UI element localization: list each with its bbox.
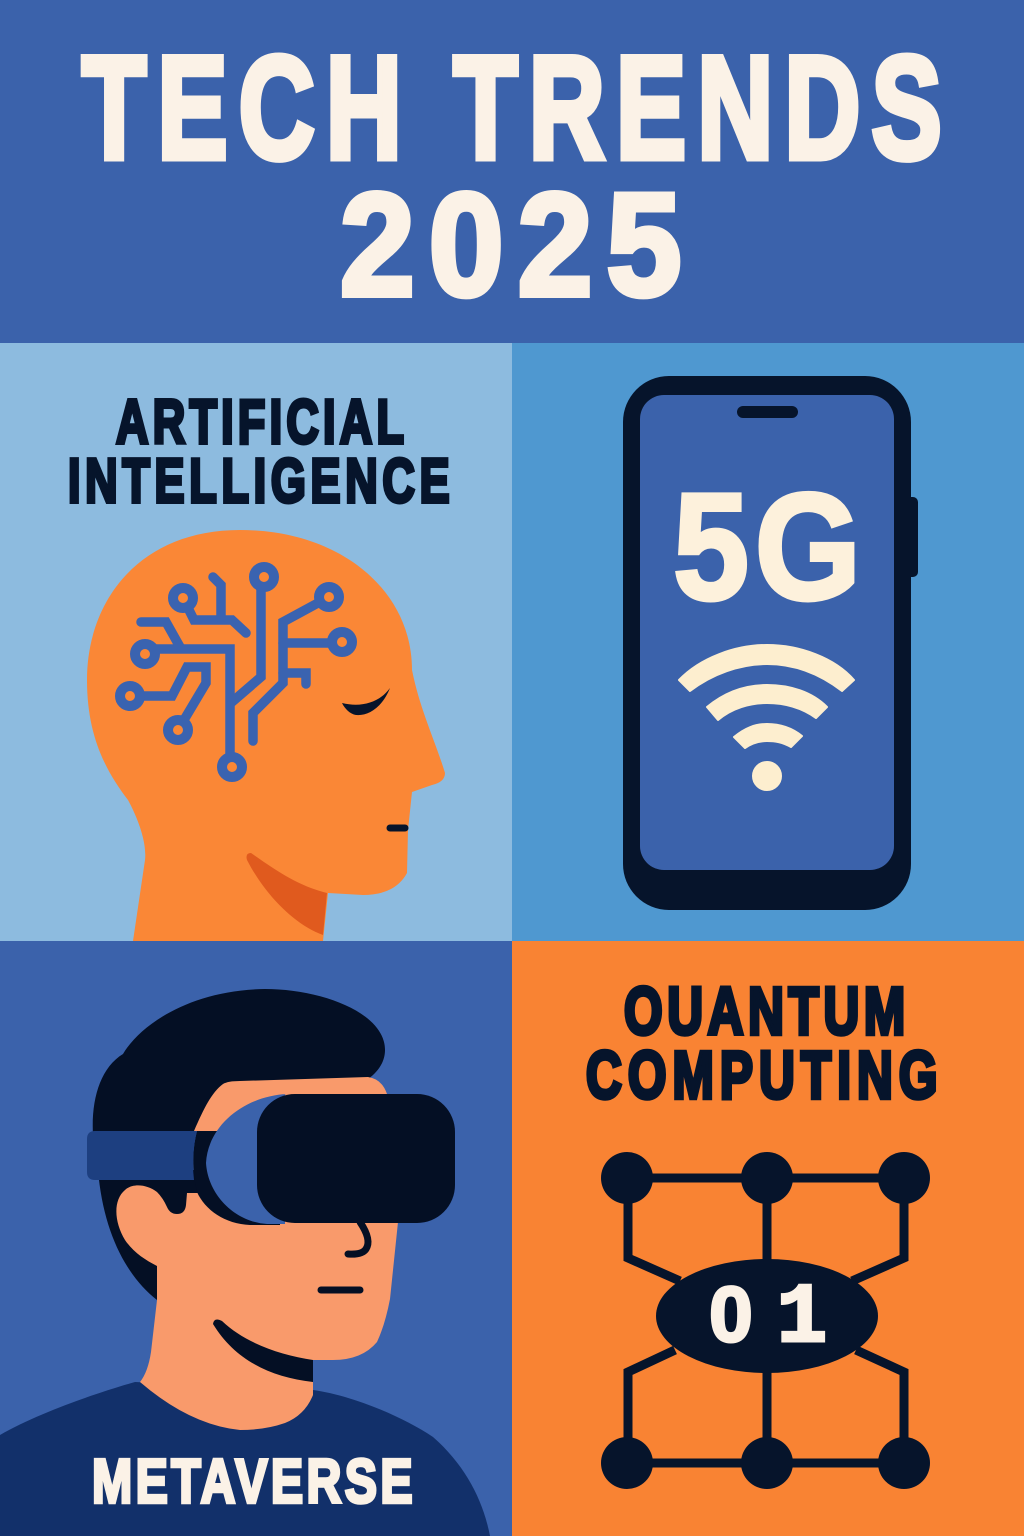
panel: quantum computing <box>512 941 1024 1536</box>
label: metaverse: METAVERSE <box>92 1447 413 1516</box>
binary digits <box>709 1270 827 1367</box>
circuit traces <box>130 577 342 767</box>
panel: metaverse <box>0 941 512 1536</box>
shirt <box>0 1382 490 1536</box>
nose <box>348 1222 368 1254</box>
headset goggle rim <box>193 1131 280 1225</box>
title: Tech Trends: TECH TRENDS <box>82 26 942 189</box>
icon: smartphone <box>623 376 918 910</box>
panel: artificial intelligence <box>0 343 512 941</box>
label: 5G: 5G <box>673 461 861 632</box>
central qubit ellipse <box>656 1259 878 1373</box>
heading: quantum computing: COMPUTING <box>586 1039 938 1113</box>
illustration: person wearing VR headset <box>0 989 490 1536</box>
phone body <box>623 376 911 910</box>
lower hair <box>98 1170 205 1300</box>
mouth <box>390 824 405 832</box>
title: 2025: 2025 <box>340 163 681 326</box>
panel: title banner <box>0 0 1024 343</box>
headset visor <box>257 1094 455 1223</box>
bottom nodes <box>601 1437 930 1489</box>
face and neck <box>116 1077 398 1430</box>
mouth <box>321 1286 360 1294</box>
panel: 5G <box>512 343 1024 941</box>
jaw shadow <box>213 1320 313 1382</box>
icon: head with circuit brain <box>87 530 445 941</box>
head silhouette <box>87 530 445 941</box>
speaker notch <box>737 406 798 418</box>
heading: quantum computing <box>586 975 938 1113</box>
circuit nodes <box>120 567 352 777</box>
neck shadow <box>246 853 327 935</box>
closed eye <box>342 688 390 715</box>
hair top <box>93 989 385 1135</box>
top nodes <box>601 1152 930 1204</box>
phone screen <box>640 395 894 870</box>
connecting lines <box>627 1178 904 1463</box>
side button <box>905 497 918 577</box>
heading: artificial intelligence: ARTIFICIAL <box>116 387 404 457</box>
binary digits: 0 <box>709 1270 753 1358</box>
heading: artificial intelligence: INTELLIGENCE <box>68 446 450 516</box>
diagram: qubit network <box>601 1152 930 1489</box>
binary digits: 1 <box>777 1272 827 1367</box>
icon: wifi signal <box>679 645 854 790</box>
headset strap <box>87 1131 197 1180</box>
heading: artificial intelligence <box>68 387 450 516</box>
headset lens <box>206 1094 287 1224</box>
heading: quantum computing: OUANTUM <box>624 975 905 1049</box>
